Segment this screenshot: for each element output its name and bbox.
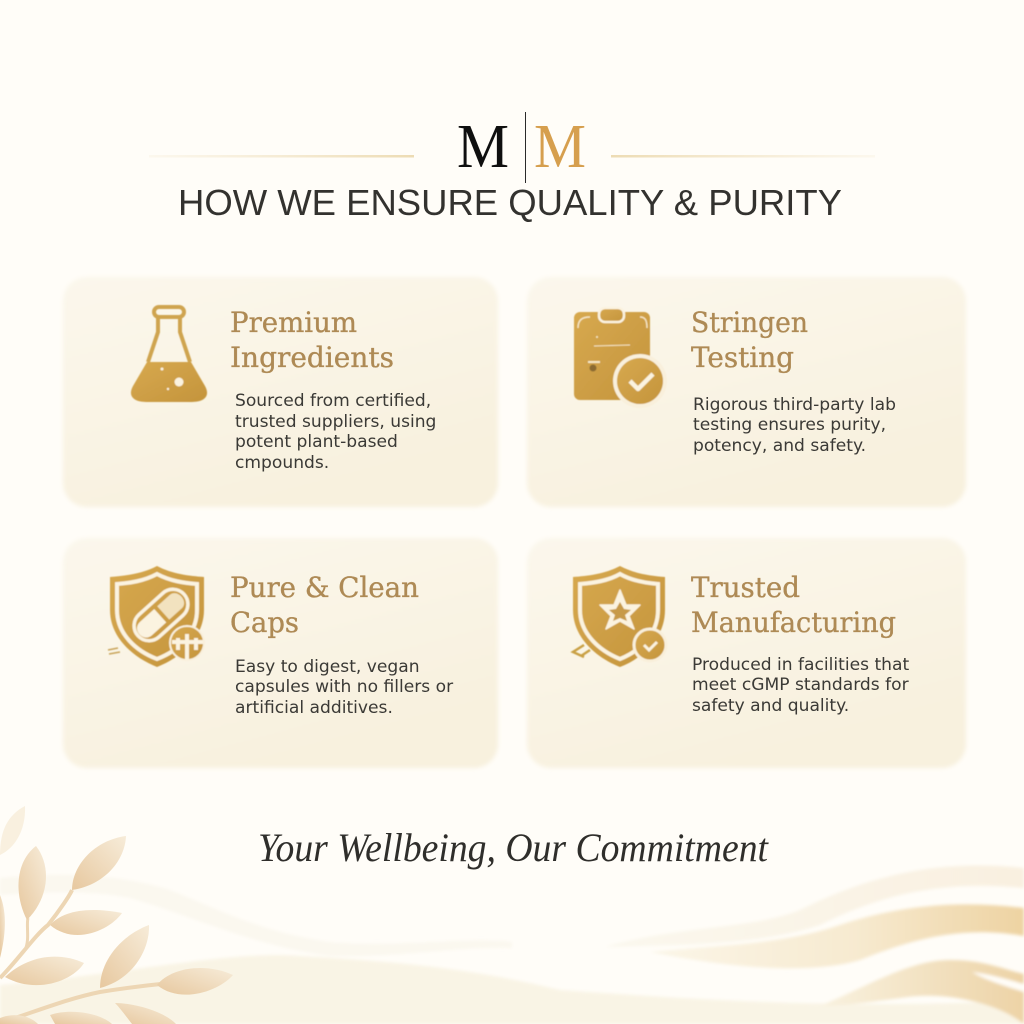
panel: premium ingredients (63, 277, 498, 507)
panel: stringent testing: Testing (691, 341, 794, 374)
panel: pure and clean caps (63, 538, 498, 768)
panel: trusted manufacturing: Manufacturing (691, 606, 896, 639)
icon: shield with star (573, 566, 666, 667)
description: potency, and safety. (693, 436, 866, 456)
description: safety and quality. (692, 696, 849, 716)
logo: M|M monogram (149, 112, 875, 183)
description: artificial additives. (235, 698, 393, 718)
panel: pure and clean caps: Caps (230, 606, 299, 639)
heading: Pure & Clean (230, 571, 419, 604)
description: Sourced from certified, (235, 391, 431, 411)
description: trusted suppliers, using (235, 412, 436, 432)
decorative waves (0, 866, 1024, 1024)
description: Produced in facilities that (692, 655, 909, 675)
logo: M|M monogram: M (457, 113, 509, 181)
description: Rigorous third-party lab (693, 395, 896, 415)
description: meet cGMP standards for (692, 675, 910, 695)
description: Easy to digest, vegan (235, 657, 420, 677)
leaves branch (0, 806, 233, 1024)
title: HOW WE ENSURE QUALITY & PURITY (178, 182, 842, 223)
panel: premium ingredients: Ingredients (230, 341, 394, 374)
description (235, 657, 454, 718)
description (235, 391, 436, 473)
description (692, 655, 910, 716)
heading: Premium (230, 306, 357, 339)
description: cmpounds. (235, 453, 329, 473)
panel: stringent testing (527, 277, 966, 507)
logo: M|M monogram: M (534, 113, 586, 181)
icon: shield with capsule (108, 566, 204, 667)
heading: Trusted (691, 571, 800, 604)
tagline: Your Wellbeing, Our Commitment (258, 825, 769, 870)
description (693, 395, 896, 456)
heading: Stringen (691, 306, 808, 339)
description: potent plant-based (235, 432, 398, 452)
icon: clipboard with check (574, 308, 667, 408)
icon: flask (131, 307, 207, 402)
description: capsules with no fillers or (235, 677, 454, 697)
description: testing ensures purity, (693, 415, 886, 435)
panel: trusted manufacturing (527, 538, 966, 768)
